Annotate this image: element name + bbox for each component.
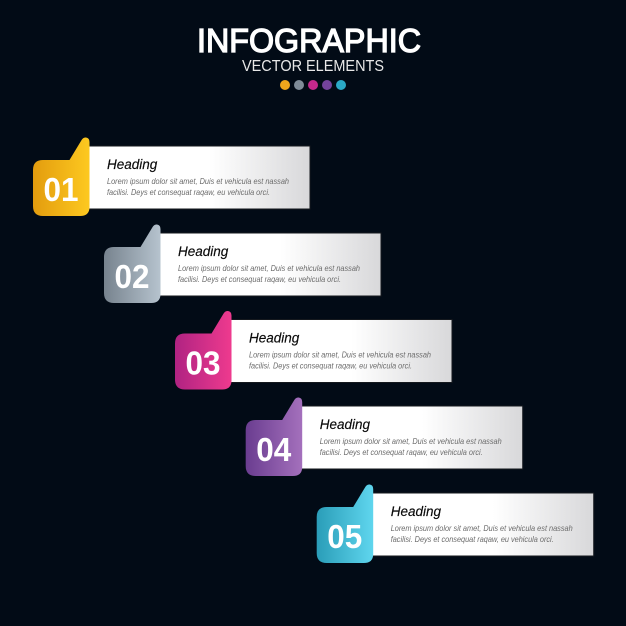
step 5: facilisi. Deys et consequat raqaw, eu vehicula orci. [391,535,554,544]
step 2: facilisi. Deys et consequat raqaw, eu vehicula orci. [178,275,341,284]
number 2: 02 [114,258,150,295]
body 2: Lorem ipsum dolor sit amet, Duis et vehicula est nassah [178,264,360,273]
panel 1 [86,146,310,209]
number 1: 01 [44,171,78,208]
step 2 [104,224,381,303]
body 4: Lorem ipsum dolor sit amet, Duis et vehicula est nassah [320,437,502,446]
number 4: 04 [256,431,292,468]
step 4 [246,397,523,476]
number 5: 05 [327,518,362,555]
heading 4: Heading [320,417,370,432]
heading 1: Heading [107,157,158,172]
badge 4 [246,397,302,476]
step 1: facilisi. Deys et consequat raqaw, eu vehicula orci. [107,188,270,197]
badge 5 [317,484,373,563]
heading 3: Heading [249,330,300,346]
step 5 [317,484,594,563]
body 5: Lorem ipsum dolor sit amet, Duis et vehicula est nassah [391,524,573,533]
step 3: facilisi. Deys et consequat raqaw, eu vehicula orci. [249,362,412,370]
heading 2: Heading [178,244,229,259]
step 4: facilisi. Deys et consequat raqaw, eu vehicula orci. [320,448,483,457]
badge 2 [104,224,160,303]
heading 5: Heading [391,504,441,519]
subtitle: VECTOR ELEMENTS [242,58,384,75]
badge 1 [33,137,90,216]
number 3: 03 [186,344,220,382]
panel 5 [370,493,594,556]
panel 4 [299,406,523,469]
panel 2 [157,233,381,296]
badge 3 [175,311,232,390]
colour dots [280,80,346,90]
step 1 [33,137,310,216]
body 3: Lorem ipsum dolor sit amet, Duis et vehicula est nassah [249,350,431,360]
title: INFOGRAPHIC [197,23,421,60]
step 3 [175,311,452,390]
body 1: Lorem ipsum dolor sit amet, Duis et vehicula est nassah [107,177,289,186]
panel 3 [228,320,452,382]
